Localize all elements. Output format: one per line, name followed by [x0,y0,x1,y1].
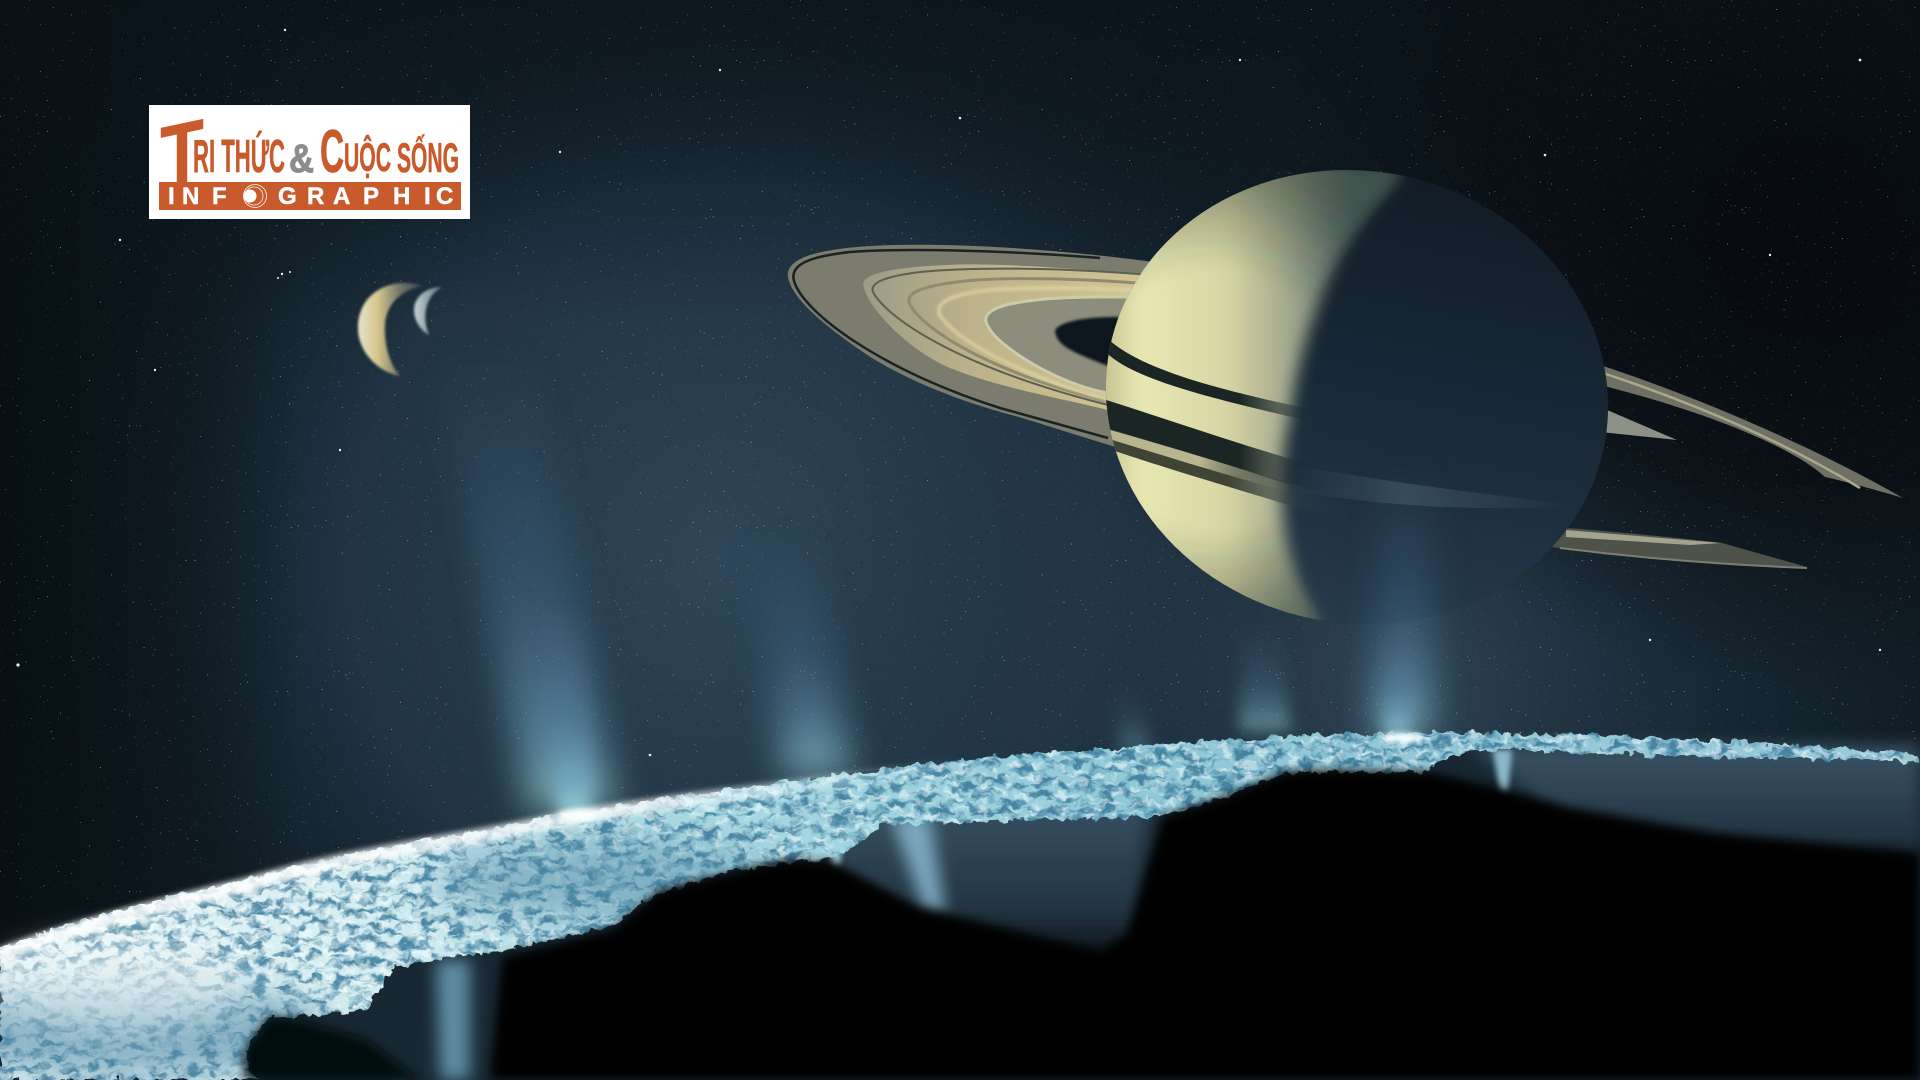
Saturn: thick ring band [1106,400,1295,484]
logo: ringed O emblem [243,184,267,208]
Saturn: front ring strip [1110,429,1288,504]
water plumes over the planet [1375,460,1435,735]
water plumes rising from the icy moon [430,340,1290,815]
Saturn: ring across dark side [1328,471,1529,508]
Saturn: planet disk [1106,170,1608,622]
logo: Tri Thức & Cuộc Sống Infographic [149,101,470,219]
Saturn: limb shading [1133,170,1394,619]
logo: large C: C [320,118,344,185]
Saturn rings: right back section [1551,365,1903,568]
Saturn: thin ring shadow [1108,342,1300,418]
moon: yellow crescent [358,283,423,376]
logo: infographic wordmark: INFOGRAPHIC [168,183,453,210]
logo: UỘC: UỘC [344,134,391,180]
logo: large T: T [160,101,204,210]
icy moon: shadowed side haze [0,742,1920,1080]
logo: Tri Thức & Cuộc Sống Infographic: RI THỨC [193,130,285,182]
logo: SỐNG: SỐNG [397,133,459,181]
icy moon: black shadow terrain [245,770,1920,1080]
Saturn: sunlit crescent [1106,170,1406,620]
logo: ampersand: & [289,137,314,181]
Saturn rings: left back section [788,245,1220,478]
icy moon: bright surface [0,720,1920,1080]
moon: small grey crescent [414,287,442,335]
logo: infographic band [159,182,461,210]
